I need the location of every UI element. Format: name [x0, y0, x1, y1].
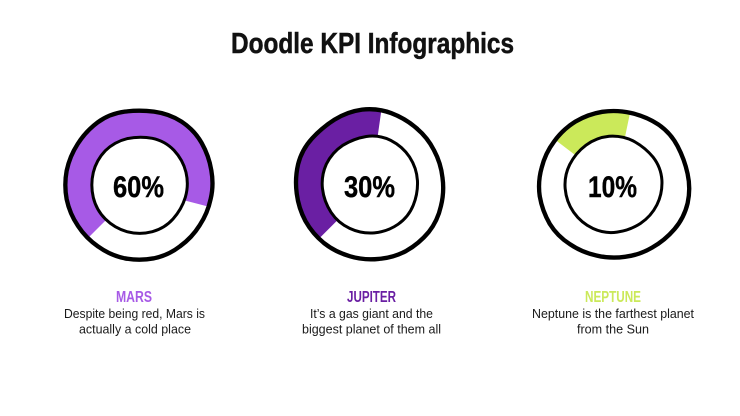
description: Neptune: Neptune is the farthest planet [532, 307, 695, 321]
panel: Mars [64, 111, 213, 336]
donut chart: Jupiter 30% [294, 107, 446, 262]
donut chart: Neptune 10% [536, 108, 692, 260]
value: 10%: 10% [588, 171, 637, 204]
label: Jupiter: JUPITER [347, 289, 396, 306]
panel: Neptune [533, 108, 694, 334]
title: Doodle KPI Infographics [231, 28, 514, 60]
description: Jupiter: biggest planet of them all [302, 322, 441, 336]
description: Mars: actually a cold place [79, 322, 191, 336]
description: Neptune: from the Sun [577, 322, 649, 336]
description: Jupiter: It’s a gas giant and the [310, 307, 433, 321]
label: Mars: MARS [116, 289, 152, 306]
description: Mars: Despite being red, Mars is [64, 307, 205, 321]
label: Neptune: NEPTUNE [585, 289, 641, 306]
value: 30%: 30% [344, 171, 395, 204]
value: 60%: 60% [113, 171, 164, 204]
panel: Jupiter [294, 107, 446, 336]
donut chart: Mars 60% [65, 111, 213, 260]
